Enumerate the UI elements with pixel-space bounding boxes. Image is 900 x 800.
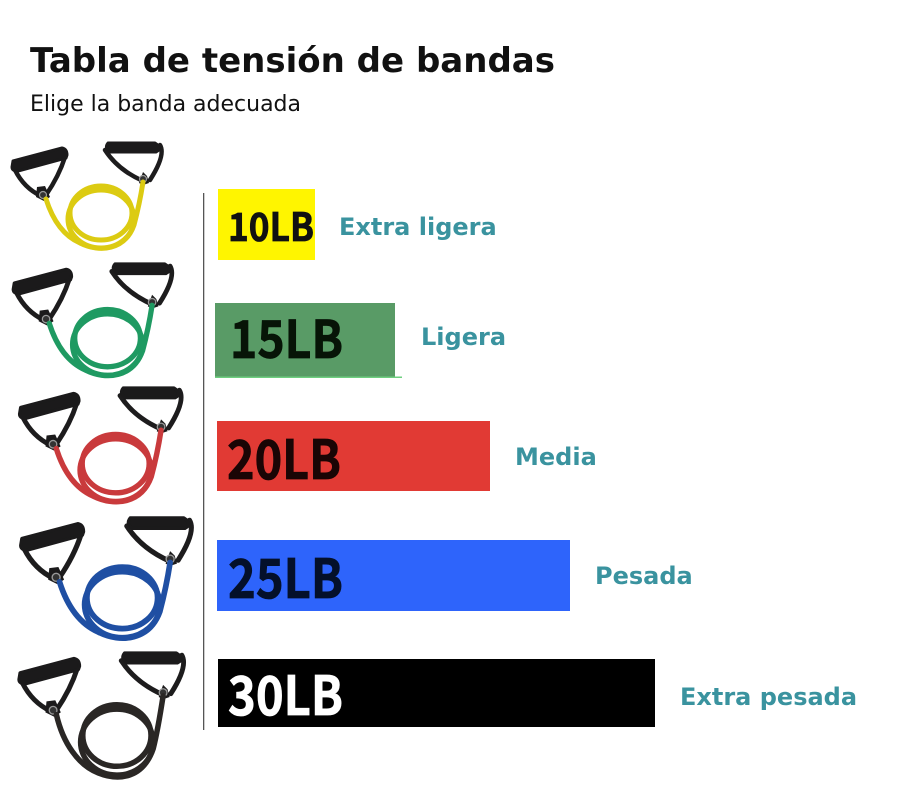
icon: black band	[19, 653, 184, 777]
label: Ligera: Ligera	[421, 323, 506, 351]
label: Media: Media	[515, 443, 597, 471]
bar: 20LB: 20LB	[227, 416, 341, 495]
vertical axis line	[203, 193, 204, 730]
icon: red band	[20, 388, 181, 502]
label: Pesada: Pesada	[595, 562, 693, 590]
bar: 25LB: 25LB	[228, 535, 343, 614]
bar: 15LB: 15LB	[230, 298, 343, 373]
bar: 10LB: 10LB	[228, 197, 314, 253]
bar: 15LB	[215, 298, 402, 378]
icon: yellow band	[12, 143, 162, 248]
title: Tabla de tensión de bandas	[30, 41, 555, 81]
bar: 25LB	[217, 535, 570, 614]
label: Extra pesada: Extra pesada	[680, 683, 857, 711]
icon: green band	[13, 264, 172, 376]
label: Extra ligera: Extra ligera	[339, 213, 497, 241]
bar: 30LB	[218, 652, 655, 731]
subtitle: Elige la banda adecuada	[30, 92, 301, 117]
bar: 10LB	[218, 189, 315, 260]
bar: 30LB: 30LB	[228, 652, 343, 731]
bar: 20LB	[217, 416, 490, 495]
icon: blue band	[21, 518, 191, 638]
